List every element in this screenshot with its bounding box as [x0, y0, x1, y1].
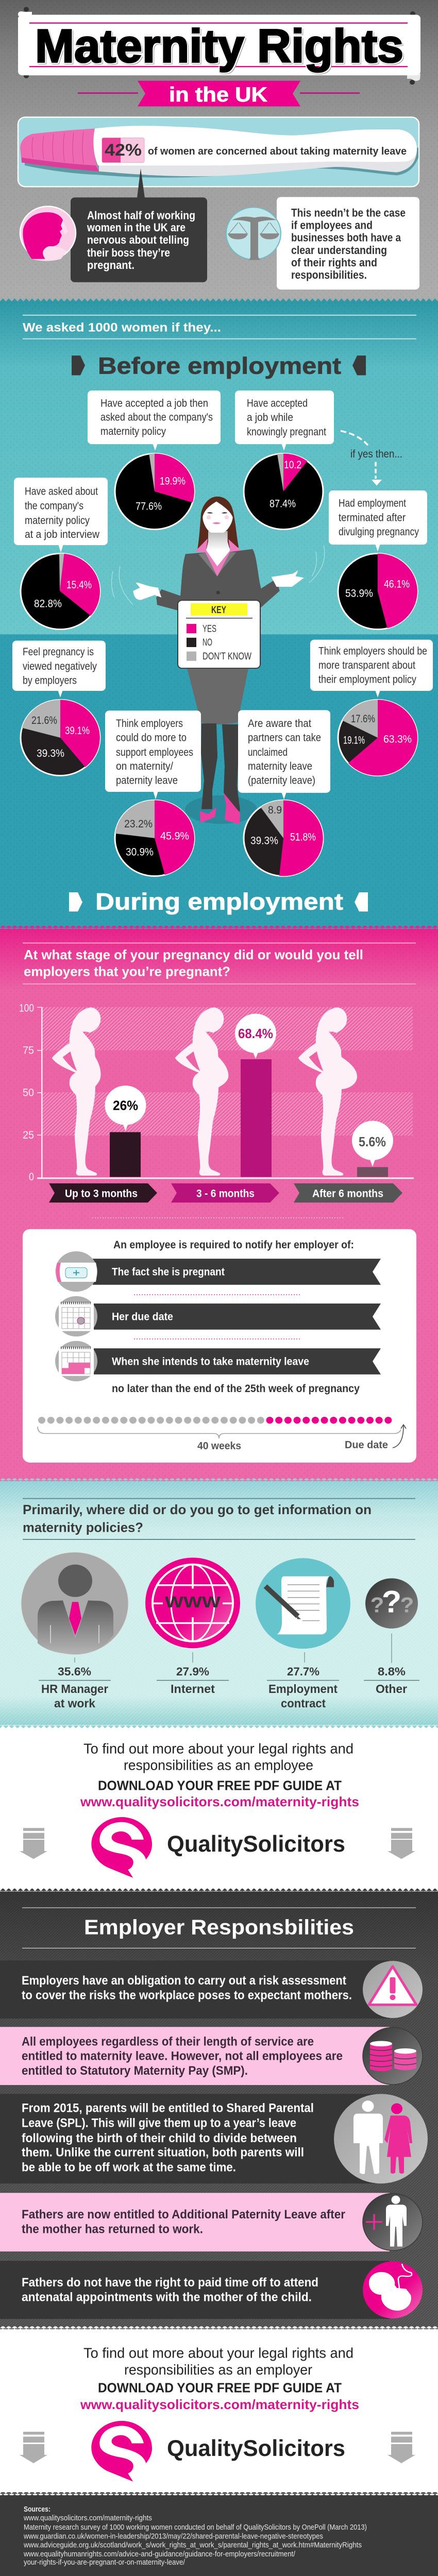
- y axis: [19, 1002, 42, 1183]
- test stick handle: [20, 128, 99, 172]
- section: sources footer: www.qualitysolicitors.com/maternity-rights: [23, 2514, 152, 2522]
- heading: employer responsibilities: Employer Responsbilities: [84, 1915, 354, 1939]
- icon: worried woman: [20, 206, 76, 261]
- question bubble: accepted a job then asked: [88, 391, 221, 451]
- icon: warning triangle: [363, 1961, 423, 2018]
- panel: rights and responsibilities text: if employees and: [291, 219, 373, 231]
- strip: shared parental leave: following the birth of their child to divide between: [22, 2131, 297, 2145]
- bar: 68.4 percent: 68.4%: [238, 1026, 273, 1041]
- pie chart: employment terminated 46.1 / 53.9: 46.1%: [384, 578, 410, 590]
- row: her due date: Her due date: [112, 1311, 173, 1323]
- key: don't know: DON'T KNOW: [203, 651, 251, 662]
- panel: rights and responsibilities text: clear understanding: [291, 244, 387, 257]
- key: don't know: [187, 651, 251, 662]
- bar: 26 percent: 26%: [113, 1098, 138, 1113]
- section: sources footer: www.equalityhumanrights.com/advice-and-guidance/guidance-for-employers/recruitment/: [23, 2550, 296, 2558]
- pie chart: asked at interview 15.4 / 82.8: [21, 553, 100, 630]
- question bubble: accepted while pregnant: knowingly pregnant: [247, 426, 326, 438]
- bar: 5.6 percent: [352, 1121, 393, 1177]
- pie chart: accepted then asked 19.9 / 77.6: 19.9%: [160, 475, 186, 487]
- call to action: employer guide: responsibilities as an employer: [124, 2362, 312, 2378]
- question bubble: viewed negatively: by employers: [23, 674, 77, 687]
- label arrow: up to 3 months: Up to 3 months: [65, 1188, 138, 1200]
- heading: we asked 1000 women: We asked 1000 women if they...: [23, 321, 221, 334]
- question bubble: could do more: on maternity/: [116, 760, 173, 772]
- heading: at what stage: employers that you’re pregnant?: [24, 964, 230, 979]
- strip: antenatal appointments: antenatal appointments with the mother of the child.: [22, 2291, 312, 2304]
- pie chart: could do more 45.9 / 30.9 / 23.2: 23.2%: [124, 818, 153, 830]
- section: pale teal background: [0, 1478, 438, 1728]
- logo: QualitySolicitors employer: [91, 2421, 345, 2482]
- call to action: employee guide: [80, 1741, 359, 1809]
- icon: other question marks: ?: [382, 1585, 401, 1619]
- question bubble: more transparent: more transparent about: [318, 659, 415, 671]
- strip: shared parental leave: them. Unlike the current situation, both parents will: [22, 2146, 304, 2159]
- icon: parents: [334, 2094, 428, 2183]
- y axis: 25: [23, 1129, 34, 1141]
- question bubble: aware of unclaimed leave: (paternity leave): [248, 774, 315, 787]
- question bubble: accepted while pregnant: [235, 391, 334, 451]
- call to action: employee guide: To find out more about your legal rights and: [83, 1741, 353, 1757]
- icon: other question marks: ?: [400, 1593, 414, 1617]
- pie chart: accepted then asked 19.9 / 77.6: 77.6%: [136, 500, 162, 512]
- strip: shared parental leave: [0, 2094, 428, 2183]
- row: her due date: [55, 1296, 381, 1336]
- pie chart: aware of unclaimed leave 51.8 / 39.3 / 8.9: 39.3%: [250, 835, 278, 846]
- section: teal survey background: [0, 298, 438, 929]
- strip: shared parental leave: From 2015, parents will be entitled to Shared Parental: [22, 2102, 314, 2115]
- pie chart: more transparent 63.3 / 19.1 / 17.6: 63.3%: [383, 733, 412, 745]
- question bubble: could do more: paternity leave: [116, 774, 178, 787]
- stat: other 8.8: [364, 1634, 419, 1696]
- stat: employment contract 27.7: Employment: [268, 1683, 338, 1696]
- section: sources footer: [0, 2493, 438, 2576]
- question bubble: asked at interview: at a job interview: [25, 528, 99, 540]
- stat: HR manager at work 35.6: at work: [54, 1697, 96, 1710]
- arrow: left down employer: [20, 2432, 47, 2463]
- silhouette: after 6 months: [298, 1007, 357, 1176]
- stat: employment contract 27.7: contract: [281, 1697, 326, 1710]
- call to action: employer guide: DOWNLOAD YOUR FREE PDF GUIDE AT: [98, 2380, 342, 2395]
- stat: HR manager at work 35.6: [39, 1657, 111, 1710]
- row: the fact she is pregnant: [55, 1251, 381, 1292]
- row: the fact she is pregnant: The fact she is pregnant: [112, 1266, 225, 1278]
- callout: nervous working women: Almost half of working: [87, 209, 195, 222]
- heading: at what stage: At what stage of your pregnancy did or would you tell: [24, 947, 363, 962]
- call to action: employer guide: [80, 2345, 359, 2412]
- bar: 5.6 percent: 5.6%: [359, 1134, 386, 1149]
- pie chart: accepted while pregnant 10.2 / 87.4: 10.2: [284, 459, 301, 471]
- strip: antenatal appointments: [0, 2261, 423, 2319]
- strip: additional paternity leave: the mother has returned to work.: [22, 2223, 203, 2236]
- icon: HR manager: [21, 1552, 128, 1655]
- pie chart: could do more 45.9 / 30.9 / 23.2: 45.9%: [160, 830, 189, 842]
- timeline: 40 weeks dots: [38, 1420, 406, 1452]
- question bubble: accepted a job then asked: asked about the company's: [100, 411, 213, 423]
- question bubble: asked at interview: Have asked about: [25, 485, 98, 498]
- pie chart: employment terminated 46.1 / 53.9: 53.9%: [345, 587, 373, 599]
- stat: other 8.8: 8.8%: [378, 1665, 406, 1678]
- key: no: [187, 637, 212, 648]
- strip: maternity leave and pay: [0, 2027, 423, 2085]
- section: sources footer: your-rights-if-you-are-pregnant-or-on-maternity-leave/: [24, 2558, 186, 2567]
- panel: rights and responsibilities text: responsibilities.: [291, 268, 367, 281]
- heading: at what stage: [23, 942, 416, 985]
- deadline text: no later than the end of the 25th week of pregnancy: [112, 1383, 360, 1395]
- section: sources footer: www.adviceguide.org.uk/scotland/work_s/work_rights_at_work_s/parental_rights_at_work.htm#MaternityRights: [23, 2541, 362, 2549]
- heading: before employment: Before employment: [98, 352, 341, 379]
- row: when she intends to take leave: [55, 1341, 381, 1381]
- heading: where did you get information: [23, 1498, 415, 1540]
- strip: risk assessment: to cover the risks the workplace poses to expectant mothers.: [22, 1989, 352, 2003]
- timeline: 40 weeks dots: 40 weeks: [197, 1440, 241, 1452]
- icon: employment contract: [256, 1558, 350, 1649]
- question bubble: viewed negatively: viewed negatively: [23, 660, 97, 672]
- question bubble: asked at interview: [14, 478, 108, 552]
- stat: internet 27.9: Internet: [171, 1683, 215, 1696]
- strip: maternity leave and pay: All employees regardless of their length of service are: [22, 2035, 314, 2048]
- question bubble: employment terminated: [329, 490, 427, 552]
- pie chart: accepted while pregnant 10.2 / 87.4: [244, 453, 323, 530]
- callout: nervous working women: nervous about telling: [87, 234, 189, 246]
- question bubble: viewed negatively: Feel pregnancy is: [23, 646, 94, 658]
- pie chart: aware of unclaimed leave 51.8 / 39.3 / 8.9: [244, 800, 323, 876]
- stat: internet 27.9: 27.9%: [176, 1665, 209, 1678]
- panel: rights and responsibilities text: of their rights and: [291, 257, 377, 269]
- callout: nervous working women: pregnant.: [87, 259, 134, 272]
- question bubble: asked at interview: the company's: [25, 500, 83, 512]
- strip: shared parental leave: be able to be off work at the same time.: [22, 2161, 236, 2174]
- pie chart: more transparent 63.3 / 19.1 / 17.6: [338, 700, 417, 775]
- title text: Maternity Rights: [35, 20, 403, 72]
- bar: 68.4 percent: [235, 1014, 276, 1177]
- icon: coin stacks: [363, 2027, 423, 2084]
- logo: QualitySolicitors employee: QualitySolicitors: [167, 1831, 345, 1857]
- y axis: 50: [23, 1087, 34, 1099]
- pie chart: asked at interview 15.4 / 82.8: 15.4%: [66, 579, 92, 591]
- strip: antenatal appointments: Fathers do not have the right to paid time off to attend: [22, 2276, 318, 2290]
- heading: where did you get information: maternity policies?: [23, 1520, 143, 1535]
- stat: HR manager at work 35.6: 35.6%: [58, 1665, 91, 1678]
- question bubble: accepted a job then asked: maternity policy: [100, 425, 166, 437]
- strip: maternity leave and pay: entitled to maternity leave. However, not all employees are: [22, 2049, 343, 2063]
- arrow: if yes then: [341, 431, 402, 485]
- section: sources footer: Sources:: [24, 2505, 50, 2514]
- strip: risk assessment: [0, 1960, 423, 2019]
- icon: scales of justice: [226, 207, 281, 260]
- stat: other 8.8: Other: [376, 1683, 407, 1696]
- stat: employment contract 27.7: [267, 1652, 339, 1710]
- question bubble: could do more: support employees: [116, 747, 193, 758]
- call to action: employee guide: DOWNLOAD YOUR FREE PDF GUIDE AT: [98, 1778, 342, 1793]
- panel: rights and responsibilities text: This needn’t be the case: [291, 207, 406, 219]
- pie chart: employment terminated 46.1 / 53.9: [338, 553, 417, 630]
- legend: key: KEY: [211, 604, 226, 616]
- strip: maternity leave and pay: entitled to Statutory Maternity Pay (SMP).: [22, 2064, 248, 2078]
- question bubble: aware of unclaimed leave: Are aware that: [248, 717, 311, 730]
- logo: QualitySolicitors employee: [91, 1817, 345, 1878]
- pie chart: viewed negatively 39.1 / 39.3 / 21.6: 21.6%: [31, 715, 57, 726]
- arrow: if yes then: if yes then...: [350, 448, 402, 460]
- subtitle ribbon: in the UK: in the UK: [169, 83, 267, 106]
- stat: HR manager at work 35.6: HR Manager: [41, 1683, 108, 1696]
- question bubble: more transparent: [310, 640, 433, 697]
- call to action: employee guide: www.qualitysolicitors.com/maternity-rights: [80, 1794, 359, 1809]
- arrow: right down employer: [388, 2432, 415, 2463]
- panel: rights and responsibilities text: [277, 197, 419, 290]
- y axis: 75: [23, 1044, 34, 1056]
- icon: fetus: [363, 2261, 423, 2318]
- label arrow: after 6 months: [294, 1183, 402, 1202]
- icon: father plus: [363, 2193, 423, 2250]
- question bubble: employment terminated: Had employment: [339, 497, 406, 509]
- key: yes: [187, 623, 216, 634]
- key: no: NO: [203, 637, 212, 648]
- bar chart: stage of pregnancy: [19, 1002, 414, 1183]
- question bubble: could do more: could do more to: [116, 732, 187, 743]
- callout: nervous working women: their boss they’re: [87, 246, 170, 259]
- title banner: [18, 7, 420, 84]
- section: employer responsibilities background: [0, 1889, 438, 2329]
- pie chart: aware of unclaimed leave 51.8 / 39.3 / 8.9: 51.8%: [290, 831, 316, 843]
- silhouette: 3 to 6 months: [175, 1007, 228, 1176]
- silhouette: up to 3 months: [52, 1007, 101, 1176]
- pie chart: viewed negatively 39.1 / 39.3 / 21.6: 39.1%: [65, 725, 90, 737]
- arrow: right down employee: [388, 1828, 415, 1859]
- panel: rights and responsibilities text: businesses both have a: [291, 231, 401, 244]
- icon: internet globe: [145, 1557, 240, 1648]
- question bubble: viewed negatively: [12, 641, 106, 697]
- label arrow: 3 to 6 months: [171, 1183, 279, 1202]
- pie chart: could do more 45.9 / 30.9 / 23.2: [115, 800, 194, 876]
- label arrow: after 6 months: After 6 months: [312, 1188, 383, 1200]
- y axis: 100: [19, 1002, 34, 1014]
- pie chart: aware of unclaimed leave 51.8 / 39.3 / 8.9: 8.9: [268, 804, 282, 816]
- section: employer guide white background: [0, 2326, 438, 2495]
- legend: key: [178, 600, 260, 668]
- question bubble: accepted while pregnant: Have accepted: [247, 397, 308, 409]
- pie chart: accepted while pregnant 10.2 / 87.4: 87.4%: [269, 498, 296, 510]
- pie chart: viewed negatively 39.1 / 39.3 / 21.6: 39.3%: [37, 748, 64, 759]
- timeline: 40 weeks dots: Due date: [345, 1439, 388, 1451]
- logo: QualitySolicitors employer: QualitySolicitors: [167, 2435, 345, 2461]
- stat: employment contract 27.7: 27.7%: [287, 1665, 319, 1678]
- question bubble: could do more: Think employers: [116, 717, 183, 730]
- question bubble: aware of unclaimed leave: maternity leave: [248, 760, 312, 772]
- callout: nervous working women: women in the UK are: [87, 222, 186, 234]
- question bubble: employment terminated: divulging pregnancy: [339, 526, 419, 538]
- row: when she intends to take leave: When she intends to take maternity leave: [112, 1355, 309, 1367]
- pie chart: could do more 45.9 / 30.9 / 23.2: 30.9%: [126, 846, 154, 858]
- icon: internet globe: WWW: [165, 1594, 221, 1611]
- subtitle ribbon: in the UK: [78, 81, 360, 106]
- label arrow: up to 3 months: [49, 1183, 157, 1202]
- question bubble: accepted while pregnant: a job while: [247, 412, 293, 423]
- icon: other question marks: [365, 1578, 418, 1629]
- question bubble: employment terminated: terminated after: [339, 512, 406, 523]
- call to action: employee guide: responsibilities as an employee: [124, 1757, 313, 1773]
- pie chart: more transparent 63.3 / 19.1 / 17.6: 19.1%: [343, 734, 365, 746]
- 42 percent result window: 42%: [105, 141, 142, 160]
- heading: where did you get information: Primarily, where did or do you go to get information on: [23, 1502, 372, 1517]
- icon: other question marks: ?: [370, 1593, 384, 1617]
- label arrow: 3 to 6 months: 3 - 6 months: [196, 1188, 255, 1200]
- question bubble: could do more: [105, 710, 201, 799]
- question bubble: aware of unclaimed leave: partners can take: [248, 732, 321, 743]
- y axis: 0: [29, 1171, 34, 1183]
- callout: nervous working women: [71, 168, 207, 282]
- panel: employee notification requirements: [23, 1218, 416, 1463]
- pie chart: more transparent 63.3 / 19.1 / 17.6: 17.6%: [351, 713, 375, 725]
- key: yes: YES: [203, 623, 216, 634]
- strip: risk assessment: Employers have an obligation to carry out a risk assessment: [22, 1974, 346, 1988]
- pie chart: accepted then asked 19.9 / 77.6: [115, 453, 194, 530]
- section: grey header background: [0, 0, 438, 301]
- stat: internet 27.9: [157, 1652, 229, 1696]
- question bubble: accepted a job then asked: Have accepted a job then: [100, 397, 208, 409]
- heading: notify employer: An employee is required to notify her employer of:: [113, 1239, 354, 1251]
- question bubble: asked at interview: maternity policy: [25, 514, 90, 527]
- section: pink background: [0, 926, 438, 1481]
- question bubble: more transparent: their employment policy: [318, 673, 416, 686]
- strip: additional paternity leave: Fathers are now entitled to Additional Paternity Leave after: [22, 2208, 345, 2222]
- concern text: of women are concerned about taking maternity leave: [148, 146, 407, 157]
- arrow: left down employee: [20, 1828, 47, 1859]
- question bubble: aware of unclaimed leave: [238, 710, 330, 799]
- pie chart: viewed negatively 39.1 / 39.3 / 21.6: [21, 700, 100, 775]
- bar: 26 percent: [105, 1086, 146, 1177]
- section: sources footer: Maternity research survey of 1000 working women conducted on behalf of QualitySolicitors by OnePoll (March 2013): [24, 2523, 367, 2532]
- call to action: employer guide: www.qualitysolicitors.com/maternity-rights: [80, 2397, 359, 2412]
- section: employee guide white background: [0, 1725, 438, 1891]
- strip: shared parental leave: Leave (SPL). This will give them up to a year’s leave: [22, 2116, 296, 2130]
- 42 percent result window: [102, 138, 144, 162]
- call to action: employer guide: To find out more about your legal rights and: [83, 2345, 353, 2361]
- heading: during employment: During employment: [95, 888, 343, 914]
- illustration: businesswoman: [112, 497, 325, 824]
- panel: pregnancy test statistic: [18, 117, 419, 187]
- pie chart: asked at interview 15.4 / 82.8: 82.8%: [34, 598, 62, 609]
- section: sources footer: www.guardian.co.uk/women-in-leadership/2013/may/22/shared-parental-leave-negative-stereotypes: [23, 2533, 323, 2540]
- strip: additional paternity leave: [0, 2193, 423, 2251]
- question bubble: aware of unclaimed leave: unclaimed: [248, 747, 288, 758]
